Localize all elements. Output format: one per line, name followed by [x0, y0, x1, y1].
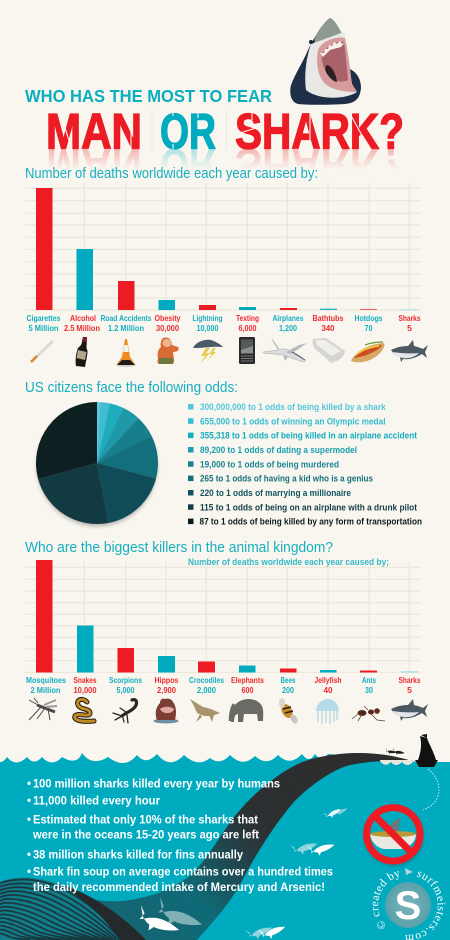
labels: animal killers	[26, 675, 421, 695]
labels: deaths worldwide: 5 Million	[28, 323, 58, 333]
bar: ants	[360, 670, 377, 672]
bullet 4: •	[27, 849, 31, 861]
logo: surfmeisters	[372, 868, 446, 940]
labels: deaths worldwide: 2.5 Million	[64, 323, 100, 333]
icon: bathtub	[313, 338, 345, 363]
bar: sharks	[401, 671, 418, 672]
subheading: animal deaths: Number of deaths worldwide each year caused by;	[188, 557, 389, 567]
labels: animal killers: 5,000	[116, 685, 135, 695]
bullet list	[27, 779, 333, 894]
bar: sharks	[401, 308, 418, 311]
cream scallops under ribbon	[380, 760, 414, 765]
labels: animal killers: 2,000	[197, 685, 216, 695]
icon: wine bottle	[76, 337, 88, 367]
labels: deaths worldwide: 70	[364, 323, 373, 333]
labels: animal killers: Snakes	[74, 675, 97, 685]
slice: genius	[97, 436, 158, 478]
icon: scorpion	[113, 700, 136, 723]
labels: animal killers: Jellyfish	[314, 675, 342, 685]
labels: deaths worldwide: Alcohol	[70, 313, 96, 323]
legend: odds: 19,000 to 1 odds of being murdered	[200, 459, 339, 469]
title: man or shark	[46, 104, 404, 160]
bar: hippos	[158, 656, 175, 672]
icon: crocodile	[190, 699, 220, 722]
bullet 1: •	[27, 779, 31, 791]
bar: texting	[239, 307, 256, 310]
icon: cartoon man	[157, 337, 179, 364]
icon: shark	[391, 340, 428, 362]
labels: animal killers: 2,900	[157, 685, 176, 695]
logo: surfmeisters: S	[395, 884, 421, 928]
icon: storm cloud with lightning	[193, 340, 223, 364]
heading: deaths worldwide: Number of deaths worldwide each year caused by:	[25, 166, 318, 182]
bar: snakes	[77, 626, 94, 672]
legend: odds: 220 to 1 odds of marrying a millionaire	[200, 488, 351, 498]
labels: deaths worldwide: Obesity	[154, 313, 181, 323]
sharks: upper pair	[323, 805, 349, 821]
bar chart: animal killers	[25, 560, 421, 672]
icon: jellyfish	[316, 699, 339, 724]
slice: airplane accident	[97, 403, 123, 463]
icon: hippo	[154, 699, 178, 724]
labels: deaths worldwide: Sharks	[398, 313, 421, 323]
bar: bathtubs	[320, 309, 337, 310]
title reflection	[46, 138, 404, 194]
labels: deaths worldwide	[26, 313, 421, 333]
legend: odds: 115 to 1 odds of being on an airplane with a drunk pilot	[200, 502, 417, 512]
title: man or shark: MAN	[46, 104, 142, 160]
legend: odds: 355,318 to 1 odds of being killed in an airplane accident	[200, 431, 417, 441]
labels: animal killers: Elephants	[231, 675, 264, 685]
labels: deaths worldwide: 340	[322, 323, 335, 333]
sharks: large pair	[134, 897, 206, 940]
bar: road accidents	[118, 281, 134, 310]
bar: bees	[280, 668, 296, 672]
labels: deaths worldwide: 1,200	[279, 323, 297, 333]
heading: odds: US citizens face the following odds:	[25, 380, 238, 396]
labels: deaths worldwide: Bathtubs	[312, 313, 344, 323]
dotted arrow	[423, 769, 439, 810]
labels: animal killers: 2 Million	[30, 685, 60, 695]
slice: supermodel	[97, 408, 138, 463]
bullet list: 38 million sharks killed for fins annually	[33, 849, 244, 861]
bullet 2: •	[27, 795, 31, 807]
heading: animal kingdom: Who are the biggest killers in the animal kingdom?	[25, 539, 333, 556]
labels: deaths worldwide: Texting	[236, 313, 259, 323]
bar: cigarettes	[36, 188, 52, 310]
bullet 5: •	[27, 867, 31, 879]
legend: odds: 300,000,000 to 1 odds of being killed by a shark	[200, 402, 386, 412]
icon: ship	[415, 734, 438, 767]
icon: shark	[391, 699, 428, 721]
labels: animal killers: Crocodiles	[189, 675, 224, 685]
logo: surfmeisters: © created by	[372, 870, 399, 930]
icon: elephant	[230, 699, 263, 722]
bullet list: 11,000 killed every hour	[33, 795, 161, 807]
bar: jellyfish	[320, 670, 336, 672]
icon: traffic cone	[116, 339, 136, 367]
labels: deaths worldwide: 1.2 Million	[108, 323, 144, 333]
labels: deaths worldwide: Airplanes	[272, 313, 304, 323]
ribbon wave	[90, 753, 415, 940]
bar: mosquitoes	[36, 560, 52, 672]
slice: murdered	[97, 418, 152, 463]
title: man or shark: SHARK?	[235, 104, 404, 160]
sharks: black pair near ship	[385, 748, 405, 756]
labels: animal killers: Hippos	[154, 675, 179, 685]
labels: deaths worldwide: 6,000	[238, 323, 257, 333]
bullet list: 100 million sharks killed every year by humans	[33, 779, 280, 791]
bar: alcohol	[76, 249, 93, 310]
labels: deaths worldwide: Lightning	[192, 313, 222, 323]
labels: deaths worldwide: Road Accidents	[100, 313, 152, 323]
icon: no shark fin soup	[365, 808, 423, 866]
slice: olympic medal	[97, 402, 110, 463]
labels: deaths worldwide: 10,000	[196, 323, 219, 333]
bar: lightning	[199, 305, 216, 310]
bar: scorpions	[118, 648, 134, 672]
legend: odds: 655,000 to 1 odds of winning an Olympic medal	[200, 416, 386, 426]
bar: obesity	[158, 300, 175, 310]
slice: shark	[97, 402, 101, 463]
icon: hotdog	[351, 342, 384, 362]
bullet list: Estimated that only 10% of the sharks that	[33, 814, 258, 826]
labels: animal killers: Mosquitoes	[26, 675, 66, 685]
icon: mobile phone	[239, 337, 255, 364]
icon: airplane	[263, 339, 307, 362]
title reflection: SHARK?	[235, 138, 404, 194]
bullet 3: •	[27, 814, 31, 826]
bullet list: Shark fin soup on average contains over a hundred times	[33, 867, 333, 879]
labels: animal killers: 10,000	[74, 685, 97, 695]
legend: odds: 89,200 to 1 odds of dating a supermodel	[200, 445, 357, 455]
labels: animal killers: Bees	[280, 675, 296, 685]
icon: snake	[75, 699, 94, 721]
labels: animal killers: Scorpions	[109, 675, 142, 685]
legend: odds: 265 to 1 odds of having a kid who is a genius	[200, 474, 373, 484]
sharks: middle pair	[290, 837, 336, 859]
slice: transportation	[36, 402, 97, 479]
icon: bee	[279, 698, 299, 725]
ocean background	[0, 753, 450, 940]
pie chart: odds	[36, 402, 158, 526]
slice: millionaire	[97, 463, 156, 523]
title: man or shark: OR	[160, 104, 216, 160]
title: who has the most to fear: WHO HAS THE MOST TO FEAR	[25, 86, 272, 106]
bar: crocodiles	[198, 662, 215, 672]
hatched wave arcs	[0, 877, 133, 940]
labels: deaths worldwide: 30,000	[156, 323, 179, 333]
shark head photo	[290, 18, 361, 105]
labels: animal killers: Sharks	[398, 675, 421, 685]
icon: cigarette	[31, 341, 53, 362]
bullet list: were in the oceans 15-20 years ago are left	[32, 829, 259, 841]
bar: hotdogs	[360, 309, 377, 310]
labels: animal killers: 5	[407, 685, 412, 695]
sharks: bottom pair	[245, 920, 287, 940]
bar chart: deaths worldwide	[25, 183, 421, 310]
labels: deaths worldwide: 5	[407, 323, 412, 333]
title reflection: MAN	[46, 138, 142, 194]
labels: animal killers: 30	[365, 685, 373, 695]
bar: elephants	[239, 666, 256, 672]
legend: odds: 87 to 1 odds of being killed by any form of transportation	[200, 517, 422, 527]
labels: deaths worldwide: Cigarettes	[26, 313, 61, 323]
labels: animal killers: 200	[282, 685, 294, 695]
slice: drunk pilot	[38, 463, 109, 524]
icon: mosquito	[29, 698, 57, 720]
bullet list: the daily recommended intake of Mercury and Arsenic!	[33, 882, 325, 894]
labels: animal killers: Ants	[362, 675, 376, 685]
labels: animal killers: 600	[242, 685, 254, 695]
title reflection: OR	[160, 138, 216, 194]
labels: deaths worldwide: Hotdogs	[354, 313, 383, 323]
icon: ant	[352, 706, 385, 721]
legend: odds	[188, 402, 422, 527]
bar: airplanes	[280, 308, 297, 310]
labels: animal killers: 40	[324, 685, 333, 695]
dark wave band	[60, 884, 146, 940]
